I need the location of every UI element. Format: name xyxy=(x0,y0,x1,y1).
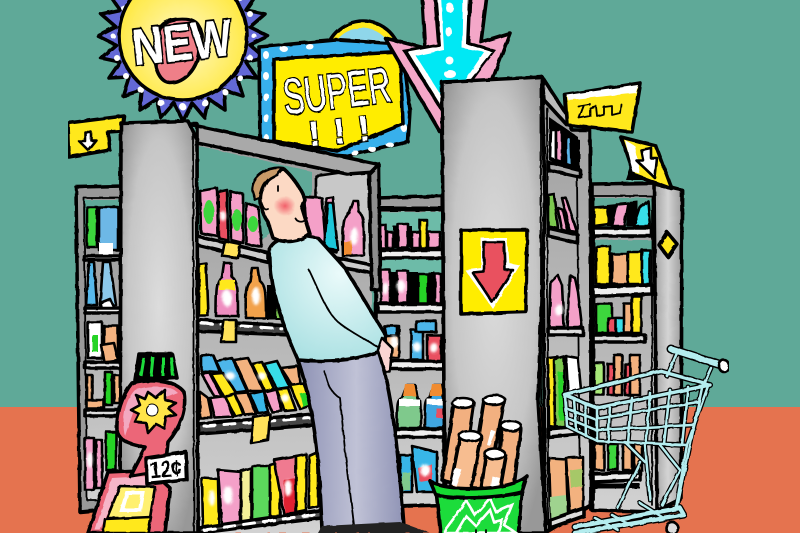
yellow disc xyxy=(119,0,247,100)
panel: left back shelf xyxy=(76,186,124,512)
panel: right back shelf xyxy=(592,183,682,512)
cart bars xyxy=(565,349,724,533)
price: 12¢ xyxy=(149,455,183,484)
blush xyxy=(274,196,296,216)
floor xyxy=(0,407,800,533)
sign: red down arrow xyxy=(461,230,527,314)
end panel xyxy=(120,121,198,533)
green cap xyxy=(135,354,177,380)
rolls xyxy=(442,395,521,490)
shelf boards xyxy=(548,162,584,528)
dotted blue frame xyxy=(259,40,410,156)
products: row 2 bottles xyxy=(199,263,285,320)
icon: yellow sun xyxy=(131,390,176,433)
bucket rim xyxy=(430,476,527,498)
products: middle shelf row 5 xyxy=(400,446,437,492)
shelf boards xyxy=(378,250,444,437)
bucket of rolled products xyxy=(430,395,527,533)
products: middle shelf row 2 xyxy=(381,270,441,304)
hand xyxy=(378,338,392,372)
products: middle shelf row 1 xyxy=(380,220,440,248)
products: left shelf rows xyxy=(85,207,120,490)
shoes xyxy=(318,522,430,533)
products: row 1 boxes xyxy=(200,188,364,256)
shopping cart xyxy=(565,349,729,533)
products: middle shelf row 4 bottles xyxy=(397,384,449,428)
blue dial behind sign xyxy=(325,21,409,124)
shirt xyxy=(270,236,386,361)
hair xyxy=(252,168,283,200)
top beam xyxy=(188,124,377,174)
right post xyxy=(369,164,380,290)
wall background xyxy=(0,0,800,408)
sign: SUPER marquee xyxy=(259,21,410,156)
shelf boards xyxy=(593,228,652,486)
shelf boards xyxy=(197,236,372,533)
sign: tilted yellow arrow tag xyxy=(621,137,672,189)
price tag xyxy=(146,452,187,484)
squiggle lettering xyxy=(578,104,621,118)
pink box with yellow label xyxy=(88,470,170,533)
pink sign body xyxy=(117,380,185,476)
icon: yellow diamond tag xyxy=(659,232,677,257)
panel: middle back shelf xyxy=(376,196,449,507)
products: right shelf rows xyxy=(594,201,650,470)
yellow shelf tags xyxy=(221,241,270,443)
starburst spikes xyxy=(98,0,268,121)
floor display with price xyxy=(88,354,187,533)
smile xyxy=(295,218,307,222)
wheel xyxy=(666,522,678,533)
sign: left yellow arrow flag xyxy=(68,116,124,157)
eye xyxy=(277,186,279,191)
handle end xyxy=(719,360,729,372)
figure: shopper looking up xyxy=(252,168,430,533)
cart outlines xyxy=(565,349,724,533)
sign: NEW starburst xyxy=(98,0,268,121)
trousers xyxy=(298,350,404,530)
products: side rows xyxy=(548,130,583,520)
products: row 3 angled books xyxy=(200,355,312,418)
panel: main left shelf xyxy=(120,121,380,533)
shelf boards xyxy=(84,256,124,416)
bucket body xyxy=(436,490,522,533)
products: row 4 books xyxy=(202,452,318,528)
shelf interior back xyxy=(195,142,372,533)
sign: big pink and cyan arrow xyxy=(385,0,510,132)
side with shelves xyxy=(542,77,592,533)
sign highlight xyxy=(123,387,178,436)
heading: SUPER: SUPER xyxy=(280,57,394,125)
exclamation marks: !!! xyxy=(306,106,385,155)
front end panel xyxy=(442,77,546,533)
heading: NEW: NEW xyxy=(129,9,236,77)
icon: small down arrow xyxy=(79,132,96,150)
head xyxy=(252,168,310,241)
yellow panel xyxy=(274,52,403,151)
pink tongue xyxy=(155,19,202,83)
sign: yellow squiggle flag xyxy=(565,83,640,132)
panel: tall front shelf unit xyxy=(442,77,592,533)
icon: white arrow xyxy=(636,148,657,178)
products: middle shelf row 3 xyxy=(384,321,441,361)
